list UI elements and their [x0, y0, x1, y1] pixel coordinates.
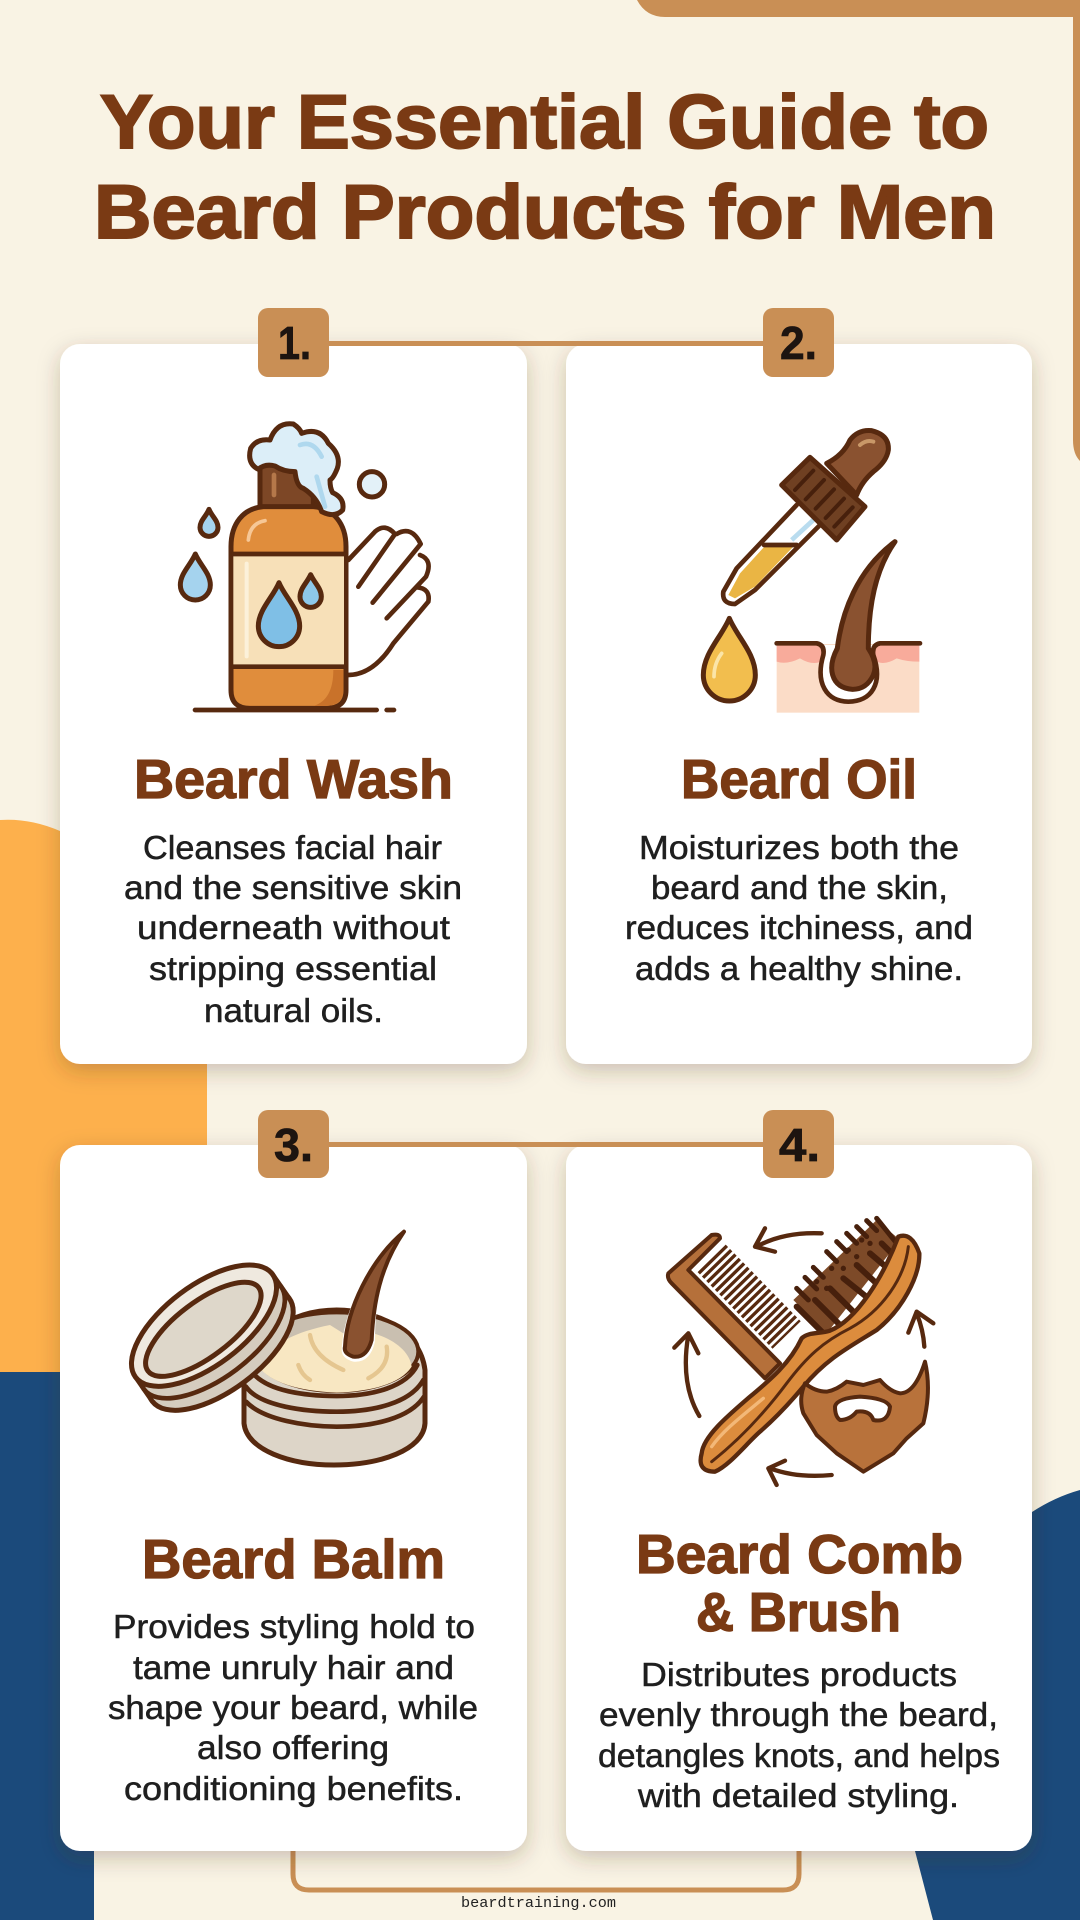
number badge 2: [763, 308, 834, 377]
oil drop: [703, 618, 755, 701]
lid: [112, 1242, 313, 1433]
number badge 3: [258, 1110, 329, 1178]
bottle body: [231, 507, 346, 708]
description: detangles knots, and helps: [598, 1737, 1000, 1774]
description: and the sensitive skin: [124, 869, 462, 906]
hair: [342, 1232, 405, 1362]
footer url: beardtraining.com: [461, 1895, 616, 1912]
connector: badges 1 to 2: [325, 341, 767, 346]
drops on label: [258, 583, 300, 647]
connector: badges 3 to 4: [325, 1142, 767, 1147]
heading: Beard Balm: [142, 1528, 445, 1590]
description: Moisturizes both the: [639, 829, 959, 866]
number badge 1: 1.: [278, 317, 311, 369]
heading: Beard Wash: [134, 748, 453, 810]
cream: [258, 1325, 412, 1393]
heading: [636, 1523, 963, 1643]
description: reduces itchiness, and: [625, 909, 973, 946]
description: Cleanses facial hair: [143, 829, 442, 866]
panel: beard balm: [60, 1145, 527, 1851]
description: with detailed styling.: [637, 1777, 959, 1814]
description: [625, 829, 973, 987]
description: natural oils.: [204, 992, 383, 1029]
follicle: [821, 645, 877, 702]
circular arrows: [674, 1228, 933, 1485]
decor: tan frame top right: [637, 0, 1080, 461]
description: shape your beard, while: [108, 1689, 478, 1726]
jar body: [244, 1310, 425, 1465]
dropper collar: [782, 457, 865, 540]
beard: [801, 1362, 928, 1472]
decor: navy shape right: [905, 1490, 1080, 1920]
decor: orange shape left: [0, 820, 207, 1372]
dropper bulb: [827, 431, 888, 495]
description: [124, 829, 462, 1029]
jar interior: [255, 1312, 418, 1391]
bottle neck: [260, 465, 313, 508]
panel: beard oil: [566, 344, 1032, 1064]
brush body: [701, 1236, 919, 1472]
decor: navy shape left: [0, 1372, 94, 1920]
number badge 1: [258, 308, 329, 377]
brush bristle pad: [793, 1220, 900, 1333]
description: beard and the skin,: [651, 869, 948, 906]
card background: [60, 344, 527, 1064]
description: adds a healthy shine.: [635, 950, 963, 987]
description: underneath without: [137, 909, 450, 946]
icon: balm jar and lid: [112, 1232, 425, 1465]
bottle label: [233, 555, 344, 666]
ground line: [195, 703, 394, 717]
icon: comb, brush and beard: [668, 1218, 933, 1485]
skin: [777, 644, 919, 713]
dropper glass: [723, 505, 820, 604]
number badge 3: 3.: [274, 1119, 313, 1171]
comb teeth: [712, 1258, 787, 1335]
description: [598, 1656, 1000, 1814]
title: Your Essential Guide to: [100, 80, 989, 165]
description: evenly through the beard,: [599, 1696, 998, 1733]
description: conditioning benefits.: [124, 1770, 463, 1807]
card background: [566, 1145, 1032, 1851]
title: Beard Products for Men: [94, 170, 996, 255]
description: Provides styling hold to: [113, 1608, 475, 1645]
comb spine: [668, 1235, 780, 1378]
falling drops: [180, 554, 210, 600]
title: [94, 80, 996, 255]
icon: dropper and hair follicle: [703, 431, 920, 713]
heading: Beard Comb: [636, 1523, 963, 1585]
bottom bracket connector: [293, 1845, 799, 1890]
heading: & Brush: [696, 1581, 901, 1643]
description: stripping essential: [149, 950, 437, 987]
number badge 2: 2.: [780, 317, 817, 369]
card background: [60, 1145, 527, 1851]
foam: [250, 424, 343, 515]
description: [108, 1608, 478, 1807]
beard mouth opening: [835, 1397, 890, 1421]
bubble: [359, 472, 385, 497]
heading: Beard Oil: [681, 748, 917, 810]
description: tame unruly hair and: [133, 1649, 454, 1686]
number badge 4: [763, 1110, 834, 1178]
number badge 4: 4.: [779, 1119, 820, 1171]
hand: [348, 528, 429, 675]
hair: [832, 542, 895, 689]
description: also offering: [197, 1729, 389, 1766]
jar rings: [246, 1365, 424, 1427]
panel: beard wash: [60, 344, 527, 1064]
bristle dots: [814, 1237, 873, 1291]
icon: bottle with foam and hand: [180, 424, 429, 710]
panel: beard comb and brush: [566, 1145, 1032, 1851]
description: Distributes products: [641, 1656, 957, 1693]
card background: [566, 344, 1032, 1064]
